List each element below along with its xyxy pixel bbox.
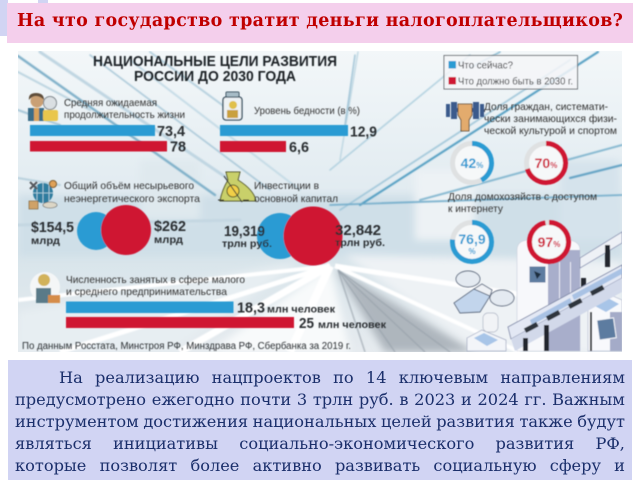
- line 1: 14: [366, 368, 387, 387]
- line 5: [15, 456, 625, 475]
- line 3: также: [519, 412, 573, 431]
- metric: capital investment: 32,842: [335, 222, 381, 239]
- metric: capital investment: основной капитал: [254, 193, 338, 205]
- line 2: [15, 390, 625, 409]
- icon: money bag: [218, 172, 256, 202]
- icon: upper rail: [580, 232, 622, 295]
- line 2: 2023: [414, 390, 455, 409]
- icon: dumbbell in fist: [446, 102, 484, 131]
- metric: life expectancy: 73,4: [157, 123, 186, 140]
- line 3: целей: [381, 412, 432, 431]
- icon: elderly couple: [28, 93, 58, 121]
- metric: life expectancy: [28, 93, 186, 156]
- metric: non-resource export: млрд: [31, 235, 60, 247]
- metric: capital investment: трлн руб.: [222, 238, 272, 250]
- title banner: [7, 3, 633, 43]
- line 2: и: [461, 390, 472, 409]
- line 1: направлениям: [500, 368, 625, 387]
- metric: small business employment: млн человек: [267, 304, 336, 316]
- chart: donut 42%: 42%: [461, 155, 483, 171]
- line 1: [59, 368, 625, 387]
- line 3: национальных: [253, 412, 376, 431]
- icon: low building: [467, 313, 506, 351]
- legend: [444, 56, 578, 89]
- metric: non-resource export: Общий объём несырьевого: [64, 180, 194, 192]
- body text panel: [8, 360, 632, 480]
- chart: donut 70%: [526, 144, 566, 182]
- line 2: 2024: [477, 390, 519, 409]
- line 4: социально-экономического: [239, 434, 474, 453]
- line 4: [15, 434, 625, 453]
- metric: small business employment: 25: [299, 315, 314, 332]
- metric: capital investment: Инвестиции в: [254, 180, 319, 192]
- title banner: На что государство тратит деньги налогоплательщиков?: [17, 11, 623, 31]
- line 5: социальную: [433, 456, 537, 475]
- heading: РОССИИ ДО 2030 ГОДА: [134, 68, 296, 85]
- line 5: сферу: [550, 456, 601, 475]
- heading: [93, 53, 337, 85]
- icon: tower: [517, 240, 580, 351]
- metric: sport participation: Доля граждан, системати-: [484, 101, 608, 113]
- icon: overhead train: [508, 265, 622, 351]
- line 5: позволят: [100, 456, 177, 475]
- metric: poverty level: 6,6: [289, 139, 309, 156]
- metric: internet access: Доля домохозяйств с доступом: [448, 191, 597, 203]
- line 3: развития: [436, 412, 515, 431]
- background: city and light rays: [18, 51, 622, 352]
- line 2: ежегодно: [152, 390, 235, 409]
- metric: non-resource export: неэнергетического экспорта: [64, 193, 200, 205]
- chart: donut 76,9%: 76,9: [458, 231, 486, 247]
- metric: poverty level: [220, 92, 377, 156]
- metric: life expectancy: 78: [170, 138, 186, 156]
- line 3: [15, 412, 625, 431]
- infographic panel: [18, 51, 622, 352]
- line 2: трлн: [313, 390, 353, 409]
- metric: small business employment: и среднего предпринимательства: [66, 286, 227, 298]
- line 5: более: [190, 456, 239, 475]
- chart: donut 76,9%: [452, 222, 492, 262]
- line 2: Важным: [552, 390, 625, 409]
- metric: capital investment: трлн руб.: [335, 237, 385, 249]
- icon: small building right: [588, 293, 622, 351]
- line 1: На: [59, 368, 83, 387]
- line 5: которые: [15, 456, 86, 475]
- line 1: ключевым: [399, 368, 488, 387]
- line 4: являться: [15, 434, 92, 453]
- line 4: РФ,: [595, 434, 625, 453]
- line 3: достижения: [143, 412, 248, 431]
- chart: donut 42%: [452, 144, 492, 182]
- line 3: инструментом: [15, 412, 139, 431]
- line 1: по: [333, 368, 354, 387]
- metric: sport participation: чески занимающихся физи-: [484, 113, 617, 125]
- chart: donut 97%: [530, 222, 568, 262]
- icon: jar of coins: [223, 92, 242, 120]
- line 5: активно: [253, 456, 322, 475]
- line 3: будут: [577, 412, 625, 431]
- metric: capital investment: 19,319: [224, 223, 265, 240]
- line 4: развития: [496, 434, 574, 453]
- line 4: инициативы: [113, 434, 218, 453]
- metric: non-resource export: млрд: [154, 234, 183, 246]
- metric: internet access: [448, 191, 597, 262]
- icon: businessman: [30, 272, 60, 303]
- line 2: 3: [297, 390, 307, 409]
- chart: donut 76,9%: %: [468, 247, 476, 256]
- legend: Что сейчас?: [458, 60, 513, 72]
- metric: life expectancy: продолжительность жизни: [64, 109, 185, 121]
- legend: Что должно быть в 2030 г.: [458, 76, 573, 88]
- icon: flying drone: [454, 271, 514, 313]
- chart: donut 97%: 97%: [538, 234, 560, 250]
- metric: non-resource export: $154,5: [31, 219, 74, 236]
- metric: life expectancy: Средняя ожидаемая: [64, 97, 157, 109]
- metric: small business employment: [30, 272, 387, 332]
- metric: non-resource export: [29, 180, 200, 255]
- metric: sport participation: [446, 101, 617, 182]
- metric: internet access: к интернету: [448, 203, 504, 215]
- line 2: руб.: [359, 390, 394, 409]
- metric: small business employment: Численность занятых в сфере малого: [66, 274, 245, 286]
- icon: export globe and boxes: [29, 180, 57, 209]
- metric: sport participation: ческой культурой и спортом: [484, 125, 617, 137]
- line 2: почти: [240, 390, 291, 409]
- line 2: предусмотрено: [15, 390, 146, 409]
- source note: По данным Росстата, Минстроя РФ, Минздрава РФ, Сбербанка за 2019 г.: [22, 340, 351, 352]
- line 2: в: [399, 390, 408, 409]
- line 1: нацпроектов: [212, 368, 321, 387]
- line 2: гг.: [524, 390, 546, 409]
- metric: poverty level: 12,9: [350, 124, 377, 140]
- decorative slide corner: [0, 0, 48, 36]
- chart: donut 70%: 70%: [535, 155, 557, 171]
- metric: small business employment: 18,3: [237, 300, 265, 316]
- line 5: развивать: [335, 456, 420, 475]
- line 5: и: [614, 456, 625, 475]
- heading: НАЦИОНАЛЬНЫЕ ЦЕЛИ РАЗВИТИЯ: [93, 53, 337, 70]
- line 1: реализацию: [95, 368, 199, 387]
- metric: poverty level: Уровень бедности (в %): [254, 105, 360, 117]
- buildings, transit line and drone: [454, 232, 622, 351]
- metric: small business employment: млн человек: [318, 319, 387, 331]
- metric: capital investment: [218, 172, 385, 266]
- metric: non-resource export: $262: [154, 218, 186, 235]
